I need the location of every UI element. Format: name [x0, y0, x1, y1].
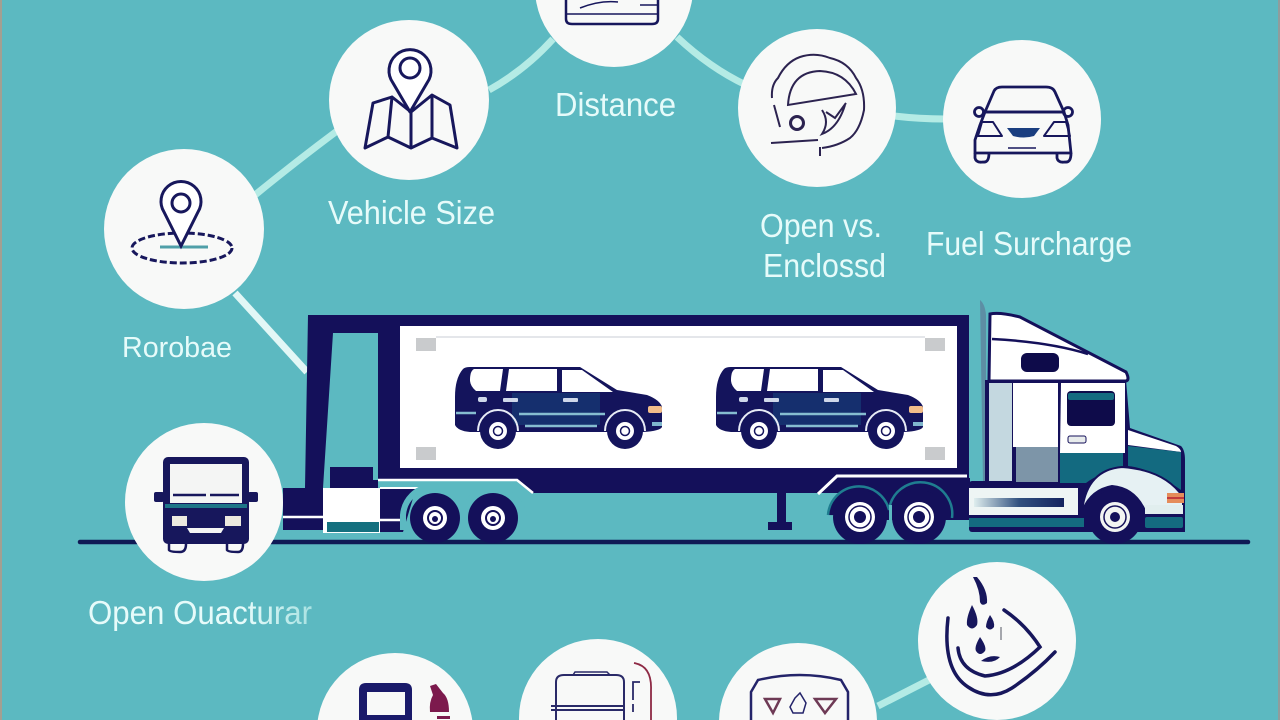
factor circle: car front — [943, 40, 1101, 198]
label: Open vs. Enclosed: Open vs. — [760, 207, 882, 244]
icon: folded map with pin — [365, 50, 457, 148]
icon: water drops in curved wave — [947, 577, 1055, 695]
trailer — [283, 315, 970, 533]
icon: screen — [359, 683, 412, 720]
label: Vehicle Size: Vehicle Size — [328, 194, 495, 231]
icon: gauge seal — [771, 55, 864, 156]
trailer support leg — [768, 493, 792, 530]
connector lines — [235, 37, 945, 706]
factor circle: top — [535, 0, 693, 67]
factor circle: gauge seal — [738, 29, 896, 187]
rear wheels — [403, 486, 524, 543]
factor circle: shipping container — [519, 639, 677, 720]
factor circle: recycling — [719, 643, 877, 720]
factor circle: water drops — [918, 562, 1076, 720]
icon: recycling box — [751, 675, 848, 720]
icon: clipped box — [566, 0, 658, 24]
factor circle: map — [329, 20, 489, 180]
label: Open vs. Enclosed: Enclossd — [763, 247, 886, 284]
label: Open Ouacturar: Open Ouacturar — [88, 594, 312, 631]
label: Rorobae: Rorobae — [122, 332, 232, 364]
icon: truck front view — [154, 457, 258, 552]
factor circle: screen and bell — [317, 653, 473, 720]
car right — [716, 367, 923, 449]
factor circle: pin on area — [104, 149, 264, 309]
truck cab — [969, 300, 1185, 544]
icon: car front view — [974, 87, 1072, 162]
icon: bell — [430, 684, 450, 719]
label: Open vs. Enclosed — [760, 207, 886, 284]
icon: location pin on ring — [132, 181, 232, 263]
ground line — [80, 540, 1248, 544]
label: Distance: Distance — [555, 86, 676, 123]
factor circle: bus front — [125, 423, 283, 581]
label: Fuel Surcharge: Fuel Surcharge — [926, 225, 1132, 262]
icon: container — [551, 663, 651, 720]
car left — [455, 367, 662, 449]
truck — [283, 300, 1185, 544]
front trailer wheels — [828, 482, 952, 544]
